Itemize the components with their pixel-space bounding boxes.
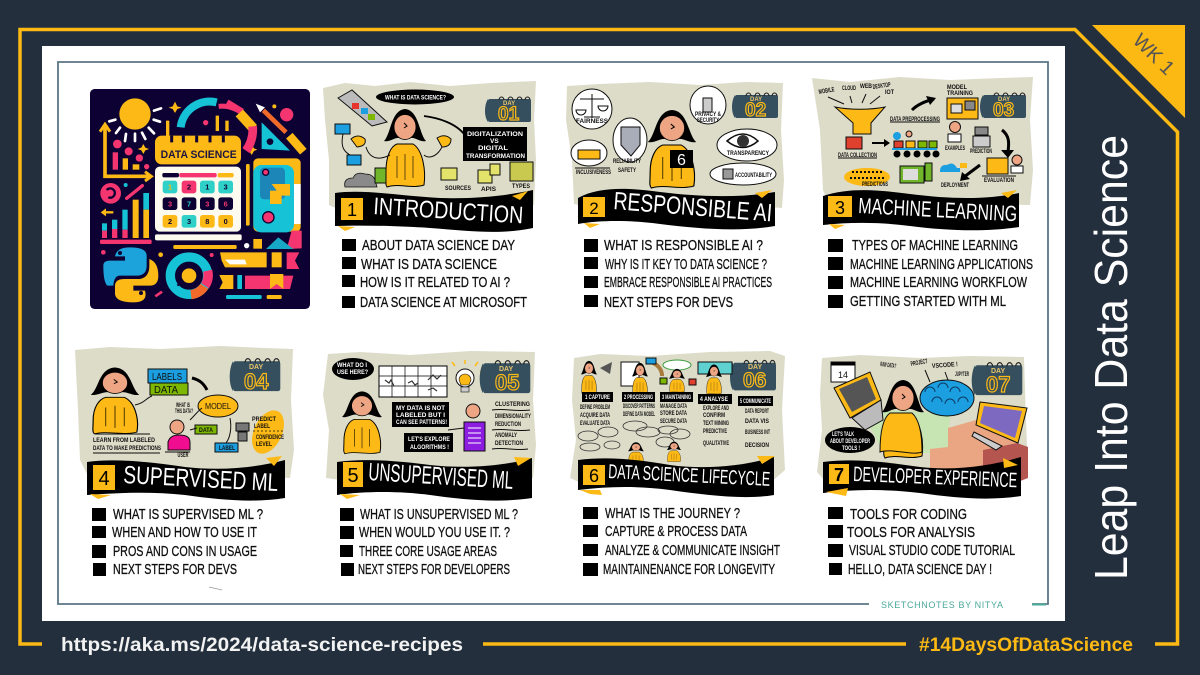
inclusiveness and reliability labels (575, 158, 641, 176)
day 2 beige background (566, 82, 784, 210)
cloud and icons (345, 162, 533, 193)
stage labels: 4 ANALYSE (700, 396, 729, 403)
pattern note (392, 402, 449, 427)
bullet list: WHEN WOULD YOU USE IT. ? (359, 524, 510, 541)
labels and data: DATA (154, 385, 178, 396)
stage detail lists: MANAGE DATA (660, 403, 687, 410)
number badge (829, 464, 849, 485)
deployment (900, 163, 969, 189)
bullet list: WHAT IS RESPONSIBLE AI ? (604, 237, 763, 254)
panel: day 4 supervised ml (75, 346, 294, 578)
number badge: 5 (347, 465, 359, 487)
bubble contents: FAIRNESS (576, 118, 609, 125)
stage detail lists: ACQUIRE DATA (580, 412, 610, 419)
bullet list (828, 237, 1033, 310)
number badge (828, 196, 852, 218)
user (165, 402, 193, 459)
calendar (480, 361, 530, 395)
stage detail lists: CONFIRM (703, 412, 725, 419)
model training: TRAINING (947, 90, 973, 97)
robot (236, 423, 249, 441)
dress enlargement (880, 413, 922, 453)
cover illustration: data science calendar: 3 (168, 199, 172, 208)
prediction highlight: LABEL (254, 423, 270, 430)
day 3 beige background (812, 77, 1033, 208)
evaluation: EVALUATION (984, 177, 1014, 184)
model training: MODEL (947, 84, 967, 91)
day 5 beige background (323, 351, 536, 480)
stage vignettes (581, 358, 732, 396)
device labels (818, 81, 894, 104)
bullet list: HOW IS IT RELATED TO AI ? (360, 274, 510, 291)
labels and data: LABELS (152, 372, 182, 383)
footer link: https://aka.ms/2024/data-science-recipes (61, 635, 463, 656)
stage labels: 5 COMMUNICATE (740, 398, 771, 405)
bullet list: NEXT STEPS FOR DEVELOPERS (358, 561, 510, 578)
model cloud (198, 395, 238, 417)
calendar: 02 (745, 100, 766, 121)
bullet list: NEXT STEPS FOR DEVS (604, 294, 733, 311)
evaluation (982, 155, 1023, 184)
speech bubble (376, 90, 454, 104)
calendar (230, 359, 280, 394)
bullet list: MACHINE LEARNING WORKFLOW (850, 274, 1028, 291)
calendar: 06 (743, 369, 766, 392)
speech bubble (332, 358, 374, 380)
cover illustration: data science calendar: 3 (205, 199, 209, 208)
ribbon (87, 456, 285, 501)
bubble contents: ACCOUNTABILITY (735, 172, 772, 179)
device labels: WEB (860, 83, 872, 90)
cover illustration: data science calendar: 3 (224, 183, 228, 192)
labels and data (135, 369, 188, 405)
data grid (379, 366, 447, 397)
bullet list: WHAT IS SUPERVISED ML ? (113, 506, 263, 523)
line to topic (424, 116, 464, 134)
bullet list (342, 237, 527, 311)
bullet list: WHEN AND HOW TO USE IT (112, 524, 257, 541)
floor and stairs (870, 410, 1028, 487)
bullet list: WHAT IS THE JOURNEY ? (605, 505, 740, 522)
stage detail lists: DEFINE DATA MODEL (623, 411, 655, 418)
algorithm list: ANOMALY (495, 432, 517, 439)
cover illustration: data science calendar: 3 (187, 217, 191, 226)
bubble contents: SECURITY (697, 117, 719, 124)
day 1 beige background (323, 81, 536, 210)
bullet list: MACHINE LEARNING APPLICATIONS (850, 256, 1033, 273)
audience questions: VSCODE ! (932, 361, 958, 370)
calendar: DAY (503, 101, 515, 107)
heading: SUPERVISED ML (123, 461, 279, 497)
speech bubble (825, 427, 875, 453)
speech bubble: TOOLS ! (842, 445, 860, 452)
cover illustration: data science calendar: 1 (205, 183, 209, 192)
cover illustration: data science calendar: 7 (187, 199, 191, 208)
vertical title: Leap Into Data Science (1085, 135, 1137, 580)
calendar: 03 (993, 100, 1014, 121)
speech bubble: WHAT DO I (337, 362, 367, 369)
device labels: MOBILE (818, 86, 836, 96)
inclusiveness and reliability labels: RELIABILITY (613, 158, 641, 165)
audience questions (880, 358, 969, 382)
bullet list: ABOUT DATA SCIENCE DAY (362, 237, 515, 254)
heading: INTRODUCTION (373, 193, 524, 229)
ribbon (335, 190, 533, 232)
pattern note: MY DATA IS NOT (396, 405, 445, 412)
bullet list (340, 506, 518, 578)
model cloud: MODEL (205, 402, 231, 411)
inclusiveness and reliability labels: INCLUSIVENESS (576, 169, 611, 176)
hands and cubes (335, 124, 451, 165)
stage labels: 2 PROCESSING (624, 394, 653, 401)
caption: DATA TO MAKE PREDICTIONS (93, 445, 161, 452)
ribbon (823, 457, 1021, 499)
device labels: IOT (885, 89, 894, 96)
mentor with purple book (448, 404, 485, 451)
bullet list: GETTING STARTED WITH ML (850, 293, 1006, 310)
heading: DEVELOPER EXPERIENCE (853, 463, 1018, 492)
bullet list: NEXT STEPS FOR DEVS (113, 561, 237, 578)
ribbon (578, 456, 775, 497)
stage detail lists: QUALITATIVE (703, 440, 729, 447)
number badge: 6 (589, 466, 599, 486)
number badge: 3 (835, 198, 845, 218)
preprocessing conveyor: DATA PREPROCESSING (890, 116, 940, 123)
caption: LEARN FROM LABELED (93, 437, 155, 444)
bubble contents (576, 94, 772, 179)
panel: day 7 developer experience: JUPYTER (955, 371, 969, 378)
heading: UNSUPERVISED ML (368, 458, 514, 495)
cover illustration: data science calendar: DATA SCIENCE (161, 149, 237, 161)
person and robot (945, 122, 992, 155)
calendar: 05 (495, 370, 519, 395)
cover illustration: data science calendar (90, 89, 310, 309)
algorithm list (492, 401, 531, 450)
user: WHAT IS (176, 402, 190, 409)
topic box: TRANSFORMATION (466, 153, 525, 160)
preprocessing conveyor (890, 116, 940, 158)
bullet list: CAPTURE & PROCESS DATA (605, 523, 747, 540)
person and robot: EXAMPLES (945, 145, 965, 152)
icon: light bulb (452, 360, 485, 392)
bullet list: DATA SCIENCE AT MICROSOFT (360, 294, 527, 311)
topic box: DIGITAL (478, 145, 508, 152)
bullet list (92, 506, 263, 578)
user: USER (178, 452, 189, 459)
number badge (341, 198, 363, 220)
cloud and icons: APIS (481, 186, 497, 193)
figure (882, 380, 924, 458)
week corner badge (1092, 25, 1185, 118)
predictions crowd (844, 168, 890, 188)
speech bubble: USE HERE? (337, 369, 368, 376)
prediction highlight (246, 405, 290, 459)
funnel: DATA COLLECTION (838, 152, 877, 159)
heading: MACHINE LEARNING (858, 193, 1018, 226)
pattern note: CAN SEE PATTERNS! (396, 419, 447, 426)
cloud and icons: TYPES (512, 183, 531, 190)
sketchnotes credit: SKETCHNOTES BY NITYA (881, 600, 1003, 610)
audience questions: PROJECT (910, 358, 928, 368)
deployment: DEPLOYMENT (941, 182, 969, 189)
icon: laptop (834, 372, 883, 430)
stage labels: 1 CAPTURE (585, 394, 610, 401)
stage detail lists: EVALUATE DATA (580, 420, 610, 427)
data and label chips: LABEL (219, 445, 235, 452)
number badge: 2 (589, 199, 599, 218)
cover illustration: data science calendar: 8 (205, 217, 209, 226)
bullet list: WHAT IS DATA SCIENCE (361, 256, 497, 273)
panel: day 2 responsible ai (566, 82, 784, 311)
calendar: 04 (244, 369, 269, 394)
bullet list: TOOLS FOR ANALYSIS (847, 524, 975, 541)
panel: day 7 developer experience (817, 355, 1028, 578)
heading: RESPONSIBLE AI (613, 187, 773, 227)
day 7 beige background (817, 355, 1028, 487)
panel: day 3 machine learning (812, 77, 1033, 310)
calendar: 01 (498, 104, 520, 125)
bullet list (828, 506, 1015, 578)
calendar: DAY (998, 97, 1010, 103)
figure (91, 368, 139, 434)
number badge: 4 (98, 468, 110, 490)
topic box (463, 127, 527, 161)
bullet list: ANALYZE & COMMUNICATE INSIGHT (605, 542, 780, 559)
day 6 beige background (570, 351, 785, 487)
stage detail lists: DATA REPORT (745, 408, 769, 415)
calendar: 07 (986, 372, 1010, 397)
pattern note: LABELED BUT I (396, 412, 445, 419)
number badge (583, 465, 605, 486)
caption (93, 434, 161, 453)
ribbon (578, 189, 775, 229)
cover illustration: data science calendar: 1 (168, 183, 172, 192)
audience questions: RAW DATA? (880, 361, 897, 370)
footer hashtag: #14DaysOfDataScience (919, 635, 1133, 656)
cover illustration: data science calendar: 0 (224, 217, 228, 226)
prediction highlight: LEVEL (256, 441, 272, 448)
six badge (670, 150, 693, 169)
person and robot: PREDICTION (970, 148, 992, 155)
white sketchnote sheet (42, 46, 1065, 621)
audience crowd (920, 380, 974, 416)
stage labels: 3 MAINTAINING (662, 394, 691, 401)
cover illustration: data science calendar: 2 (168, 217, 172, 226)
inclusiveness and reliability labels: SAFETY (618, 167, 636, 174)
panel: day 5 unsupervised ml (323, 351, 536, 578)
arrow to model (192, 378, 207, 390)
stage detail lists: DISCOVER PATTERNS (623, 403, 655, 410)
bullet list (584, 237, 772, 311)
stage detail lists: TEXT MINING (703, 420, 729, 427)
six badge: 6 (677, 152, 686, 169)
cloud and icons: SOURCES (445, 185, 472, 192)
bullet list: VISUAL STUDIO CODE TUTORIAL (849, 542, 1015, 559)
panel: day 6 data science lifecycle (570, 351, 785, 578)
calendar (980, 93, 1026, 121)
figure (384, 109, 426, 187)
day 4 beige background (75, 346, 294, 480)
stage detail lists: DATA VIS (745, 418, 770, 425)
bullet list: TOOLS FOR CODING (850, 506, 967, 523)
speech bubble: LET'S TALK (832, 431, 854, 438)
prediction highlight: CONFIDENCE (256, 434, 284, 441)
number badge (343, 462, 363, 487)
panel: day 1 introduction (323, 81, 536, 311)
number badge: 7 (834, 465, 844, 485)
model training (947, 84, 978, 119)
calendar: DAY (748, 364, 762, 371)
bubble contents: PRIVACY & (695, 111, 721, 118)
bullet list: PROS AND CONS IN USAGE (113, 543, 257, 560)
stage detail lists: EXPLORE AND (703, 405, 729, 412)
panel: day 4 supervised ml: THIS DATA? (175, 408, 193, 415)
topic box: DIGITALIZATION (467, 131, 523, 138)
speech bubble: WHAT IS DATA SCIENCE? (385, 94, 446, 102)
ribbon (337, 457, 532, 501)
algorithm list: DIMENSIONALITY (495, 413, 531, 420)
stage detail lists: BUSINESS INT (745, 429, 770, 436)
bubble contents: TRANSPARENCY (727, 150, 770, 157)
bullet list: WHY IS IT KEY TO DATA SCIENCE ? (605, 256, 767, 273)
bullet list: HELLO, DATA SCIENCE DAY ! (848, 561, 992, 578)
question bubbles (578, 421, 690, 451)
stage detail lists: PREDICTIVE (703, 428, 727, 435)
stage detail lists (580, 403, 770, 449)
topic box: VS (490, 138, 499, 145)
bullet list: THREE CORE USAGE AREAS (359, 543, 497, 560)
explore note: ALGORITHMS ! (410, 444, 449, 451)
figure (342, 391, 382, 454)
calendar (972, 363, 1022, 397)
value bubbles (571, 86, 777, 185)
algorithm list: DETECTION (495, 440, 523, 447)
funnel (835, 107, 885, 159)
prediction highlight: PREDICT (252, 416, 276, 423)
stage labels (582, 392, 773, 406)
calendar: DAY (750, 97, 762, 103)
cover illustration: data science calendar: 6 (224, 199, 228, 208)
data and label chips (190, 408, 238, 452)
device labels: DESKTOP (872, 81, 891, 91)
bullet list (583, 505, 780, 578)
number badge (583, 197, 605, 218)
number badge (93, 465, 115, 490)
explore note (404, 433, 453, 452)
icon: monitor (972, 402, 1027, 450)
date page (831, 362, 855, 382)
calendar (732, 93, 778, 121)
calendar (730, 360, 776, 392)
bullet list: EMBRACE RESPONSIBLE AI PRACTICES (604, 274, 772, 291)
calendar: DAY (249, 364, 263, 371)
icon: tablet (338, 90, 387, 126)
stage detail lists: SECURE DATA (660, 418, 687, 425)
speech bubble: ABOUT DEVELOPER (830, 438, 870, 445)
heading: DATA SCIENCE LIFECYCLE (608, 461, 771, 491)
date page: 14 (838, 370, 848, 380)
small figures (628, 442, 681, 464)
arrows (872, 96, 1014, 181)
algorithm list: REDUCTION (495, 421, 521, 428)
algorithm list: CLUSTERING (495, 401, 530, 408)
predictions crowd: PREDICTIONS (862, 181, 888, 188)
data and label chips: DATA (199, 427, 213, 434)
ribbon (823, 190, 1019, 230)
explore note: LET'S EXPLORE (408, 436, 451, 443)
stage detail lists: DECISION (745, 442, 769, 449)
calendar (485, 97, 531, 125)
bullet list: WHAT IS UNSUPERVISED ML ? (360, 506, 518, 523)
calendar: DAY (499, 366, 513, 373)
figure (648, 110, 696, 188)
stage detail lists: STORE DATA (660, 410, 687, 417)
number badge: 1 (347, 200, 357, 220)
bullet list: MAINTAINENANCE FOR LONGEVITY (603, 561, 775, 578)
calendar: DAY (991, 368, 1005, 375)
cover illustration: data science calendar: 2 (187, 183, 191, 192)
bullet list: TYPES OF MACHINE LEARNING (852, 237, 1018, 254)
device labels: CLOUD (842, 85, 856, 92)
week corner badge: WK 1 (1128, 30, 1178, 80)
stage detail lists: DEFINE PROBLEM (580, 404, 610, 411)
